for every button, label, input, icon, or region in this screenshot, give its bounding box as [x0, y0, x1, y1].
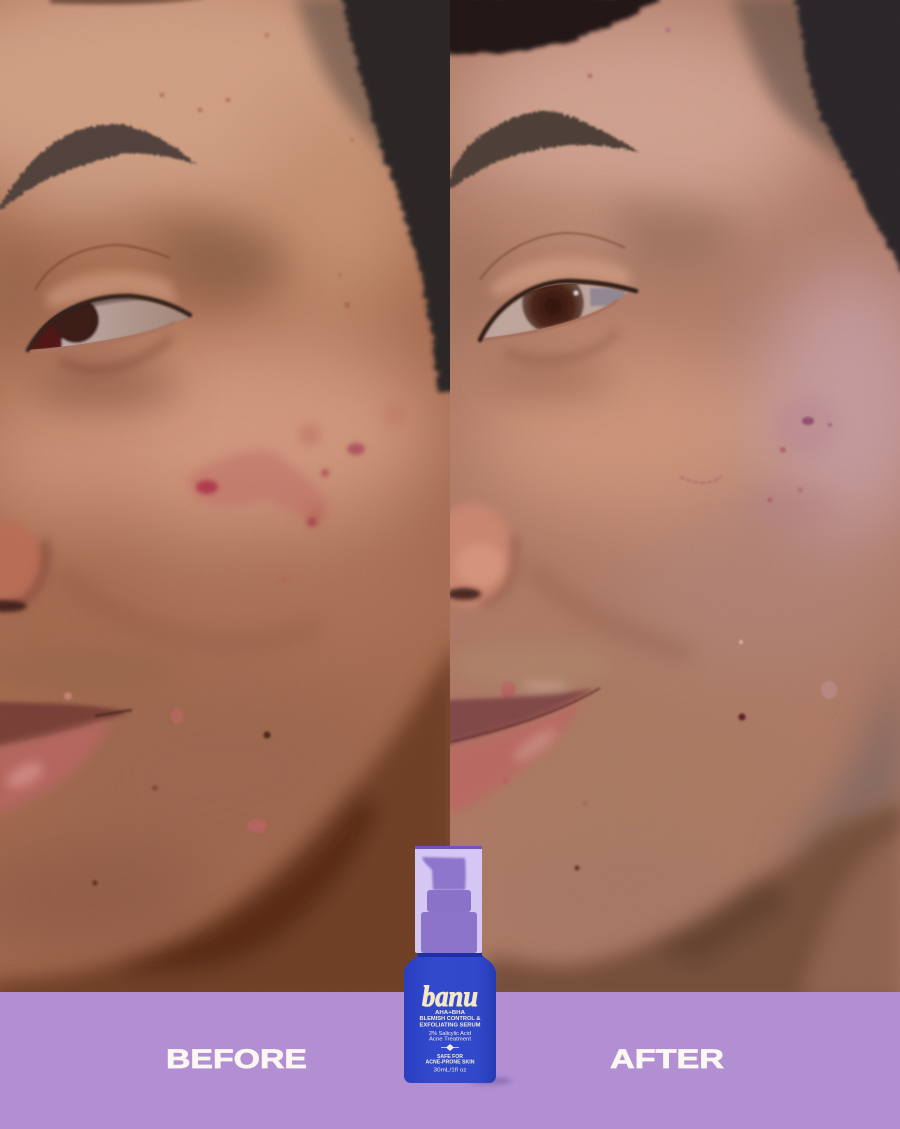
bottle body — [404, 955, 496, 1083]
eye: after — [470, 233, 640, 360]
skin tones: before — [0, 0, 460, 950]
hair: after — [445, 0, 900, 290]
product description — [420, 1010, 481, 1074]
product description: 30mL/1fl oz — [434, 1068, 467, 1074]
panel: after photo — [430, 0, 900, 1010]
acne marks: before — [64, 32, 406, 886]
nose: after — [450, 501, 522, 610]
product description: ACNE-PRONE SKIN — [426, 1060, 475, 1066]
eyebrow: after — [445, 111, 640, 192]
panel: before photo — [0, 0, 460, 1010]
bottle cap — [415, 846, 482, 953]
product description: EXFOLIATING SERUM — [420, 1022, 481, 1028]
eye: before — [20, 245, 200, 370]
jaw and neck background: after — [483, 798, 900, 992]
product description: SAFE FOR — [437, 1054, 463, 1060]
lips: before — [0, 656, 155, 813]
label: after: AFTER — [610, 1044, 724, 1074]
brand wordmark: banu — [422, 980, 478, 1013]
eyebrow: before — [0, 124, 198, 214]
skin texture: after — [453, 0, 900, 366]
product description: Acne Treatment — [429, 1036, 472, 1042]
hair: before — [50, 0, 460, 392]
eye socket shadow: before — [0, 190, 285, 407]
product description: BLEMISH CONTROL & — [420, 1016, 480, 1022]
lips: after — [450, 656, 601, 813]
eye socket shadow: after — [437, 197, 740, 396]
skin tones: after — [450, 0, 900, 661]
mouth crease shadow: after — [538, 574, 683, 656]
skin texture: before — [46, 0, 450, 386]
jaw and neck background: before — [0, 640, 460, 1010]
label: before: BEFORE — [166, 1044, 307, 1074]
cheek and jaw shadow: after — [780, 666, 900, 854]
bottom label band — [0, 992, 900, 1129]
acne marks: after — [500, 27, 838, 872]
product description: 2% Salicylic Acid — [429, 1031, 471, 1037]
nose: before — [0, 519, 46, 612]
mouth crease shadow: before — [60, 570, 320, 644]
product: serum bottle — [404, 846, 512, 1085]
bottle shadow — [468, 1077, 512, 1085]
product description: AHA+BHA — [435, 1010, 465, 1016]
